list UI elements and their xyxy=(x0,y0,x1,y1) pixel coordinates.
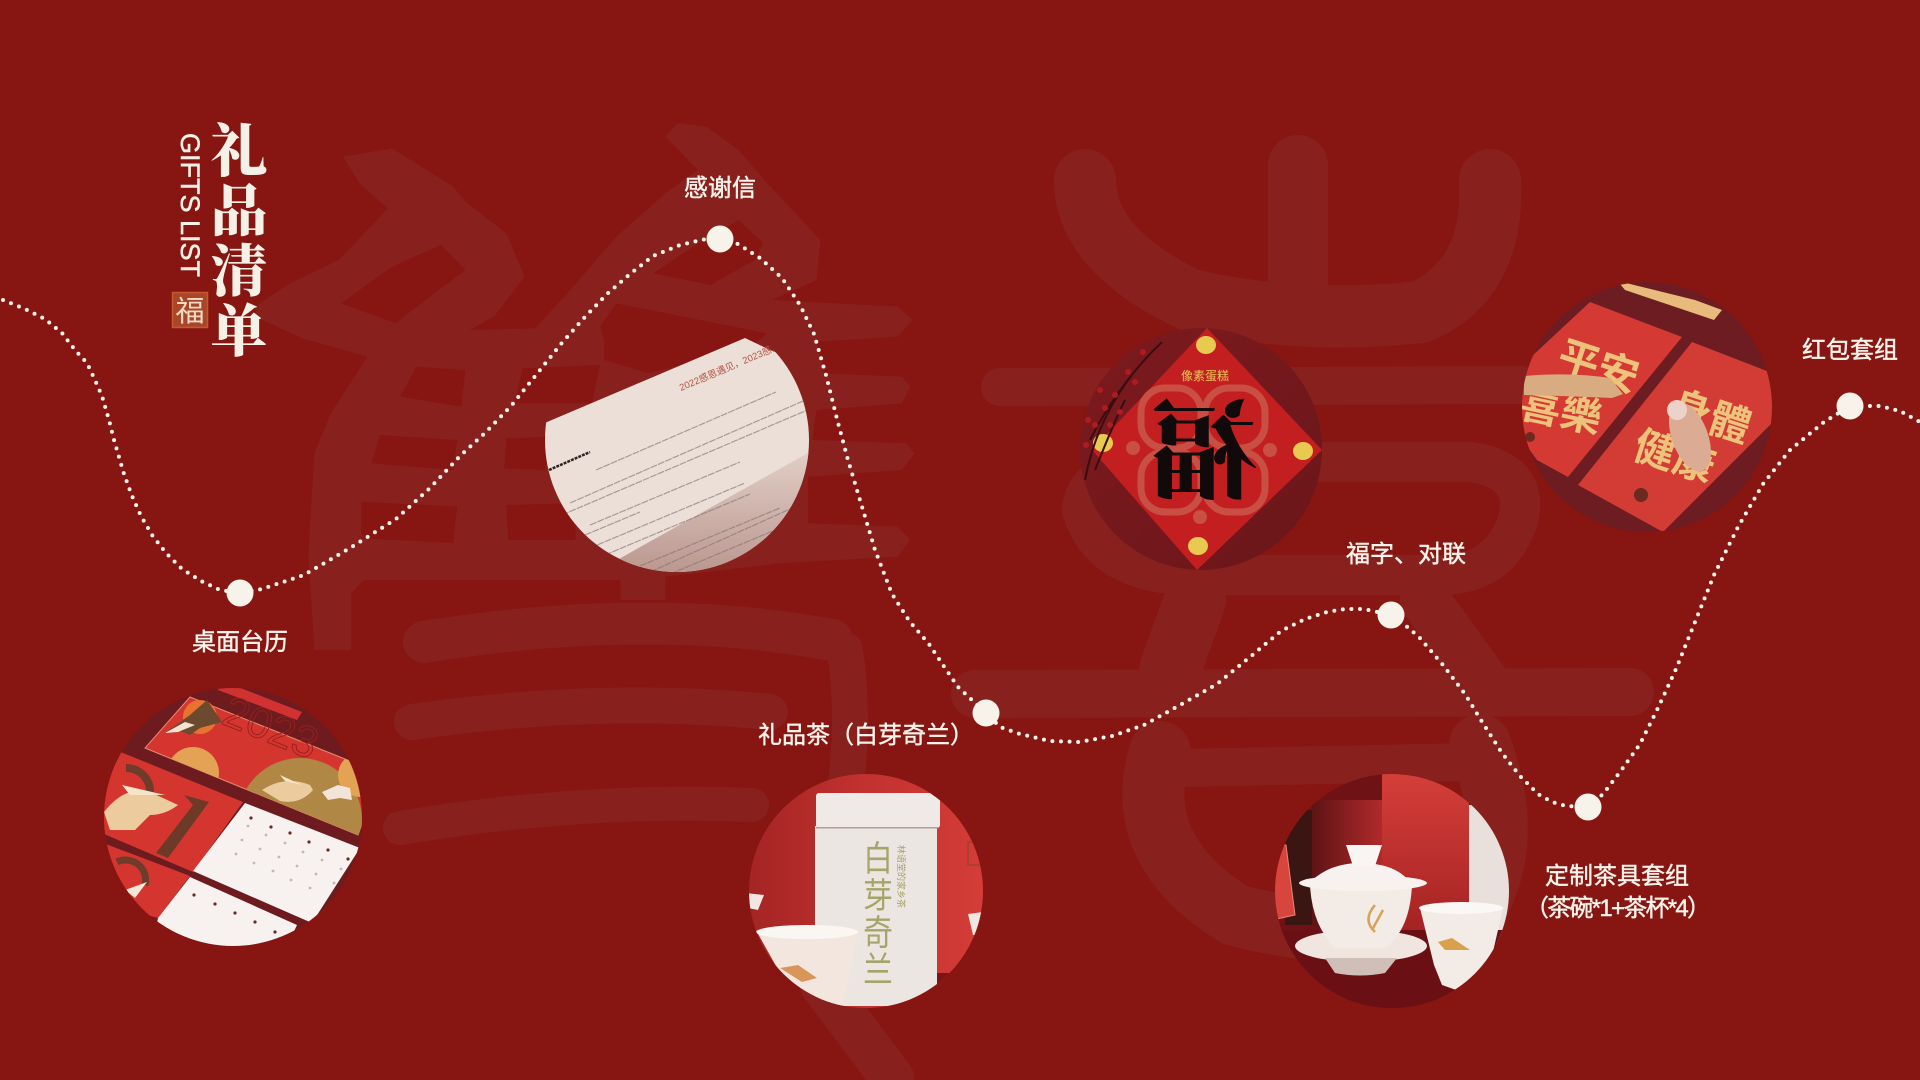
label: 桌面台历 xyxy=(192,629,288,656)
can name xyxy=(864,841,892,983)
title: gifts list: 礼 xyxy=(210,121,268,184)
photo: fu diamond xyxy=(1075,325,1330,575)
envelope blessing right: 身體 xyxy=(1664,382,1756,451)
title: gifts list xyxy=(210,121,268,364)
node: fu character and couplets xyxy=(1075,325,1466,628)
photo: gaiwan and cup xyxy=(1270,770,1515,1015)
label: （茶碗*1+茶杯*4） xyxy=(1525,895,1711,922)
can name: 奇 xyxy=(863,914,893,953)
node: tea set xyxy=(1270,770,1711,1015)
label: 定制茶具套组 xyxy=(1545,863,1689,890)
subtitle: GIFTS LIST: GIFTS LIST xyxy=(175,133,205,277)
label: 红包套组 xyxy=(1802,337,1898,364)
title: gifts list: 单 xyxy=(210,301,268,364)
node: calendar xyxy=(104,580,362,946)
watermark calligraphy backdrop xyxy=(255,123,1630,1078)
can subtitle: 林语堂的家乡茶 xyxy=(896,845,907,908)
photo: desk calendar xyxy=(104,688,362,946)
label: 感谢信 xyxy=(684,175,756,202)
envelope blessing right: 健康 xyxy=(1628,422,1720,491)
node: red envelopes xyxy=(1515,278,1898,538)
fu character: 福 xyxy=(1151,396,1257,513)
title: gifts list: 清 xyxy=(210,241,268,304)
photo: letter xyxy=(545,338,809,572)
brand: 像素蛋糕 xyxy=(1181,369,1229,383)
label: 礼品茶（白芽奇兰） xyxy=(758,722,974,749)
title block xyxy=(172,121,268,364)
node: gift tea xyxy=(745,700,1000,1015)
marker xyxy=(1378,602,1404,628)
letter heading: 2022感恩遇见，2023感谢有你 xyxy=(677,333,800,394)
route: dotted path xyxy=(3,239,1920,807)
photo: tea can xyxy=(745,770,990,1015)
seal stamp: 福 xyxy=(175,295,205,328)
marker xyxy=(1836,392,1864,420)
year text: 2023 xyxy=(216,687,325,769)
can name: 兰 xyxy=(863,951,893,990)
envelope blessing left: 喜樂 xyxy=(1516,380,1606,442)
marker xyxy=(1574,794,1602,820)
envelope blessing right xyxy=(1634,390,1752,484)
photo: red envelopes xyxy=(1515,278,1780,538)
node: thank-you letter xyxy=(545,175,809,572)
can name: 白 xyxy=(863,840,893,879)
label: 福字、对联 xyxy=(1346,541,1466,568)
label xyxy=(1525,863,1711,922)
marker xyxy=(706,226,734,252)
can name: 芽 xyxy=(863,877,893,916)
marker xyxy=(226,580,254,606)
marker xyxy=(972,700,1000,726)
envelope blessing left: 平安 xyxy=(1552,332,1644,401)
envelope blessing left xyxy=(1522,338,1640,436)
title: gifts list: 品 xyxy=(210,181,268,244)
